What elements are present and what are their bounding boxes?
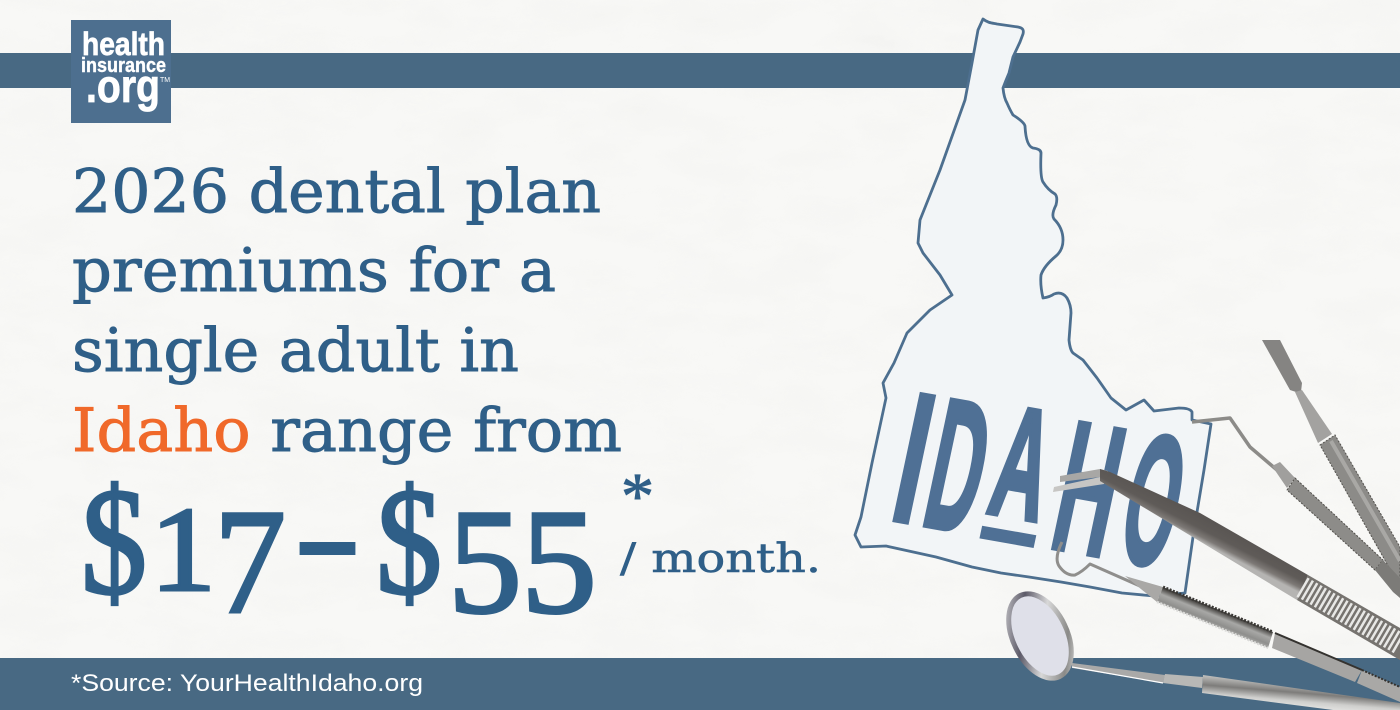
logo: health xyxy=(82,26,165,62)
headline xyxy=(72,157,622,466)
state name: D xyxy=(911,361,1006,573)
headline: premiums for a xyxy=(72,236,556,306)
tweezers xyxy=(1053,469,1400,660)
price range: 1 xyxy=(150,483,216,617)
state name: A xyxy=(978,373,1068,555)
price range: 5 xyxy=(521,479,597,645)
logo: TM xyxy=(160,77,170,84)
price range xyxy=(81,458,597,645)
headline: Idaho range from xyxy=(72,396,622,466)
price range: – xyxy=(303,483,352,594)
state name: O xyxy=(1107,395,1201,607)
logo: .org xyxy=(86,60,160,112)
state name xyxy=(879,355,1201,607)
per month label: / month. xyxy=(620,536,821,582)
logo: insurance xyxy=(81,55,166,77)
Idaho state map xyxy=(855,19,1211,607)
probe instrument xyxy=(1192,418,1400,598)
hooked probe instrument xyxy=(1057,542,1400,702)
spatula instrument xyxy=(1262,340,1400,587)
price range: 5 xyxy=(448,479,522,645)
price range: 7 xyxy=(214,479,286,645)
source note: *Source: YourHealthIdaho.org xyxy=(71,670,423,697)
headline: single adult in xyxy=(72,316,519,386)
top band xyxy=(0,53,1400,88)
price range: $ xyxy=(376,458,442,627)
headline: 2026 dental plan xyxy=(72,157,601,227)
state name: I xyxy=(879,355,949,563)
state name: H xyxy=(1039,383,1139,596)
bottom band xyxy=(0,658,1400,710)
dental mirror xyxy=(996,584,1400,710)
logo xyxy=(71,20,171,123)
price range: $ xyxy=(81,458,147,627)
asterisk: * xyxy=(621,460,654,533)
